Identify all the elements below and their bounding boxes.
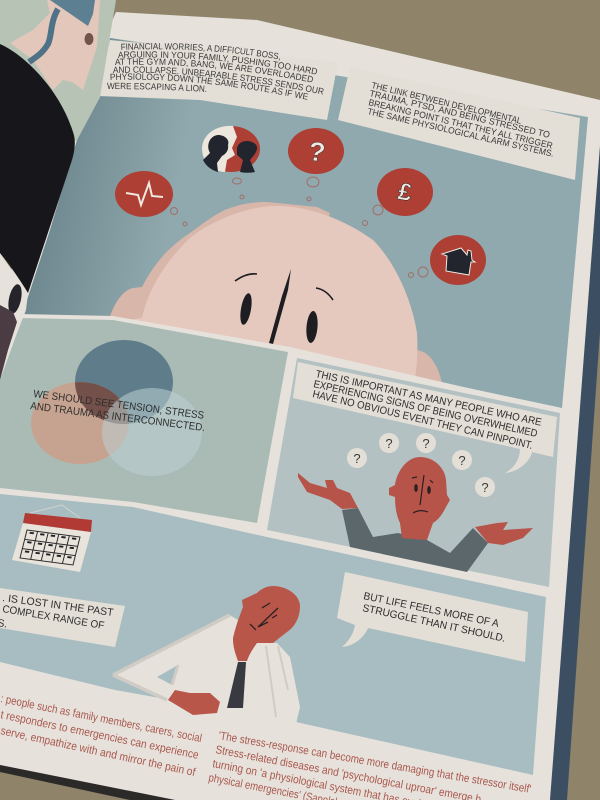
venn text: WE SHOULD SEE TENSION, STRESS	[33, 388, 205, 422]
left page	[0, 0, 116, 150]
icon: house	[430, 235, 486, 285]
text box: financial worries: PHYSIOLOGY DOWN THE SAME ROUTE AS IF WE	[110, 73, 308, 100]
text box: lost in the past	[0, 588, 125, 647]
venn text: AND TRAUMA AS INTERCONNECTED.	[30, 400, 206, 434]
icon: pound	[377, 168, 433, 216]
left brow	[235, 274, 257, 281]
speech box	[293, 362, 557, 473]
lower book edge	[0, 765, 175, 800]
right hand	[475, 522, 533, 545]
circle: trauma	[102, 388, 202, 476]
text box: the link: THE SAME PHYSIOLOGICAL ALARM SYSTEMS.	[367, 106, 555, 159]
icon: couple	[202, 126, 260, 173]
book cover edge	[548, 145, 600, 800]
question bubbles: ?	[353, 451, 361, 466]
text box: the link	[338, 67, 580, 180]
speech box: THIS IS IMPORTANT AS MANY PEOPLE WHO ARE	[314, 368, 543, 429]
shirt	[342, 508, 488, 572]
arm gap	[157, 665, 178, 685]
question bubbles: ?	[385, 436, 393, 451]
question bubbles: ?	[481, 480, 489, 495]
left hand	[298, 473, 358, 509]
text box: financial worries: AND COLLAPSE. UNBEARABLE STRESS SENDS OUR	[113, 66, 324, 95]
black left page panel	[0, 44, 75, 293]
dog silhouette	[6, 283, 24, 315]
text box: financial worries: ARGUING IN YOUR FAMILY, PUSHING TOO HARD	[118, 51, 318, 74]
tie	[227, 662, 246, 708]
question bubbles: ?	[422, 436, 430, 451]
circle: stress	[31, 382, 129, 464]
face	[412, 475, 433, 513]
panel dividers	[0, 314, 565, 600]
right brow	[316, 288, 333, 300]
text box: financial worries	[100, 40, 336, 120]
caption: left: : people such as family members, carers, social	[0, 693, 203, 745]
speech box: EXPERIENCING SIGNS OF BEING OVERWHELMED	[312, 378, 539, 440]
left eye	[238, 292, 254, 326]
face	[113, 206, 417, 379]
speech box: life struggle	[337, 572, 528, 662]
right eye	[305, 311, 319, 343]
caption: left: serve, empathize with and mirror the pain of	[0, 725, 197, 779]
dark photo strip	[0, 305, 17, 380]
blue blob	[50, 0, 95, 26]
shirt	[113, 614, 300, 724]
big head	[110, 202, 442, 383]
text box: financial worries: AT THE GYM AND, BANG, WE ARE OVERLOADED	[115, 58, 313, 82]
icon: pulse	[115, 171, 173, 217]
question bubbles: ?	[458, 453, 466, 468]
head	[389, 457, 450, 540]
text box: the link: TRAUMA, PTSD, AND BEING STRESSED TO	[369, 88, 551, 140]
text box: financial worries: FINANCIAL WORRIES, A DIFFICULT BOSS,	[121, 43, 280, 61]
panel: top blue	[24, 38, 588, 408]
panel: bottom	[0, 494, 546, 775]
caption: left: t responders to emergencies can experience	[0, 709, 200, 762]
brown dot	[84, 33, 94, 45]
speech box: life struggle: STRUGGLE THAN IT SHOULD.	[361, 602, 507, 645]
right ear	[415, 350, 442, 383]
calendar	[12, 505, 92, 572]
panel: shrugging man	[267, 358, 560, 587]
head	[233, 586, 300, 661]
face	[250, 603, 278, 630]
text box: the link: THE LINK BETWEEN DEVELOPMENTAL	[371, 80, 523, 126]
blue line	[29, 9, 58, 62]
panel: venn diagram	[0, 318, 288, 523]
icon: question mark	[288, 128, 344, 174]
circle: tension	[75, 340, 173, 424]
left ear and shadow	[110, 202, 330, 330]
icon: question mark: ?	[307, 136, 327, 168]
question bubbles	[347, 433, 495, 497]
text box: lost in the past: . IS LOST IN THE PAST	[2, 592, 115, 619]
hand	[168, 690, 220, 715]
pink blob	[10, 0, 100, 90]
caption: left	[0, 693, 203, 779]
speech box: HAVE NO OBVIOUS EVENT THEY CAN PINPOINT.	[311, 388, 534, 452]
thought bubbles	[170, 177, 428, 278]
speech box: life struggle: BUT LIFE FEELS MORE OF A	[362, 590, 500, 630]
seated man figure	[113, 586, 300, 724]
shrugging man figure	[298, 457, 533, 572]
left page lower piece	[0, 253, 28, 380]
circle overlap	[75, 382, 129, 424]
icon: pound: £	[396, 178, 414, 207]
text box: lost in the past: COMPLEX RANGE OF	[2, 603, 105, 632]
text box: financial worries: WERE ESCAPING A LION.	[107, 82, 206, 92]
text box: the link: BREAKING POINT IS THAT THEY ALL TRIGGER	[368, 97, 554, 151]
nose	[269, 269, 291, 344]
